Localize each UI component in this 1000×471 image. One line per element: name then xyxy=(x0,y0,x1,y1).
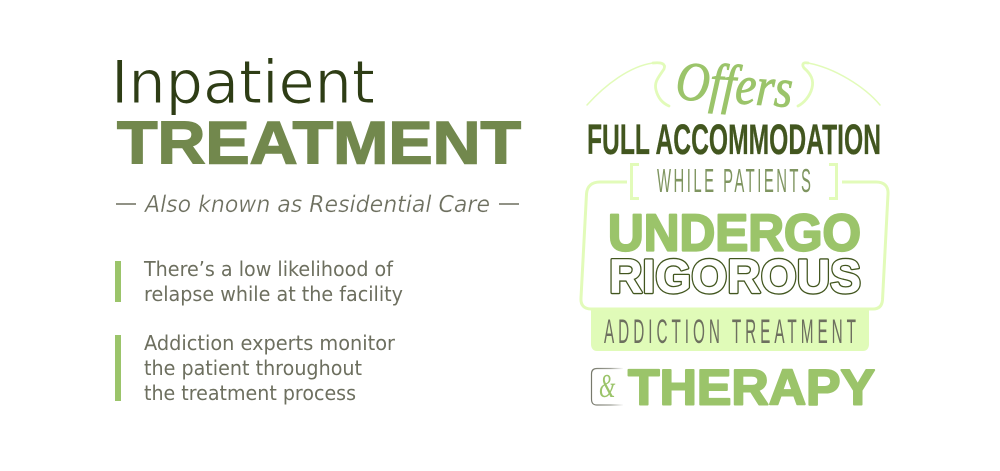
decorative swashes around Offers xyxy=(587,63,880,106)
icon: ampersand box xyxy=(592,368,623,405)
text: RIGOROUS outlined: RIGOROUS xyxy=(609,250,861,302)
fact: low likelihood of relapse xyxy=(115,257,403,306)
text: WHILE PATIENTS: WHILE PATIENTS xyxy=(657,164,811,200)
icon: ampersand box: & xyxy=(599,368,615,405)
fact: experts monitor the patient xyxy=(115,331,396,405)
title: Inpatient: Inpatient xyxy=(111,48,375,118)
title: TREATMENT: TREATMENT xyxy=(117,110,521,176)
fact: experts monitor the patient: the patient throughout xyxy=(144,356,362,380)
fact: experts monitor the patient: Addiction experts monitor xyxy=(144,331,396,355)
subtitle: also known as: Also known as Residential Care xyxy=(143,192,490,218)
fact: experts monitor the patient: the treatment process xyxy=(144,381,356,405)
text: THERAPY: THERAPY xyxy=(628,360,875,416)
fact: low likelihood of relapse: There’s a low likelihood of xyxy=(143,257,394,281)
heading: Offers: Offers xyxy=(674,50,795,119)
text: UNDERGO: UNDERGO xyxy=(608,204,861,262)
banner: ADDICTION TREATMENT: ADDICTION TREATMENT xyxy=(604,312,856,351)
panel: right typographic lockup xyxy=(581,50,888,416)
panel: left title and facts xyxy=(111,48,521,405)
text: RIGOROUS outlined: RIGOROUS xyxy=(609,250,861,302)
fact: low likelihood of relapse: relapse while at the facility xyxy=(144,282,403,306)
frame with brackets xyxy=(581,164,888,309)
